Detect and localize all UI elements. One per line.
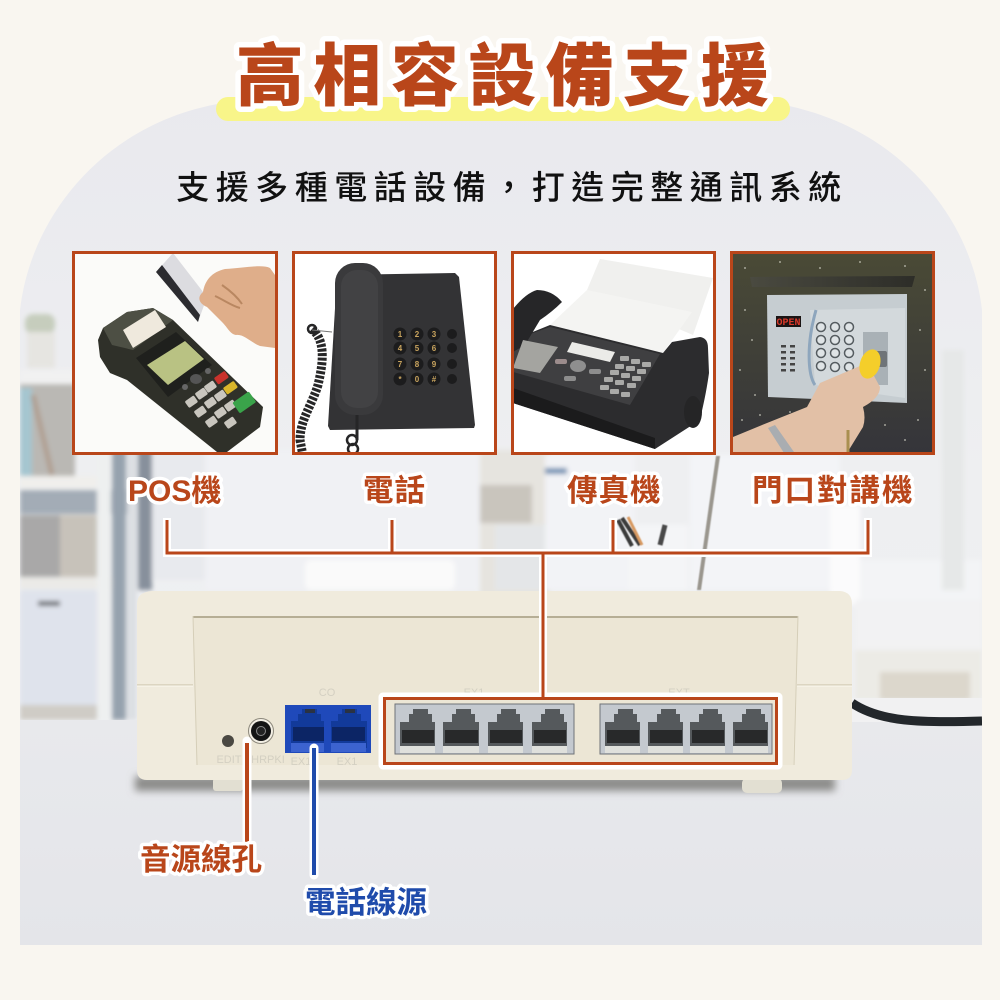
blue telephone jacks [285,705,371,753]
panel: telephone photo: 1 [398,330,403,339]
display [776,316,801,327]
title: 高相容設備支援 [236,39,778,115]
recessed rear panel [193,616,798,765]
device: extension box rear: EX1 [291,756,311,768]
panel: telephone photo: 6 [432,344,437,353]
callout frame around ports [384,698,776,764]
gray port group A [395,704,574,754]
connector: device bracket to ports [167,518,868,697]
panel: telephone photo: 3 [432,330,437,339]
audio jack [248,718,274,744]
connector: phone line [310,748,318,875]
panel: telephone photo: 5 [415,344,420,353]
panel: telephone photo: * [398,375,402,384]
device: extension box rear [137,591,852,793]
icon: POS body [98,308,263,452]
panel: door intercom photo: OPEN [776,318,801,329]
label: POS: POS機 [128,475,221,508]
label: telephone: 電話 [363,474,426,508]
panel: telephone photo: # [432,375,437,384]
device: extension box rear: EXT [668,687,690,699]
label: audio port: 音源線孔 [140,843,262,877]
panel: telephone photo: 9 [432,360,437,369]
device: extension box rear: CHRPKI [243,754,285,766]
panel: telephone photo [292,251,497,456]
icon: phone base [328,273,475,430]
label: fax: 傳真機 [567,474,662,508]
small hole [222,735,234,747]
connector: audio jack [242,741,252,850]
cable [852,703,982,722]
icon: yellow fob [859,349,881,379]
label: phone source: 電話線源 [305,886,427,920]
device: extension box rear: EDIT [216,754,242,766]
icon: handset [513,290,562,352]
icon: fax body [513,325,709,449]
hand [733,363,880,453]
icon: hand [199,266,275,348]
gray port group B [600,704,772,754]
intercom plate [767,294,907,403]
reader [863,332,888,385]
panel: telephone photo: 7 [398,360,403,369]
case body [137,591,852,780]
subtitle: 支援多種電話設備，打造完整通訊系統 [176,169,848,206]
foot [742,778,782,793]
foot [213,778,243,791]
speaker grid [513,340,558,373]
table surface [20,720,982,945]
panel: telephone photo: 2 [415,330,420,339]
panel: telephone photo: 8 [415,360,420,369]
white outline of port callout [381,695,780,767]
device: extension box rear: EX1 [337,756,357,768]
device: extension box rear: CO [319,687,336,699]
LCD [567,342,615,362]
icon: handset [335,263,381,308]
panel: door intercom photo [730,251,935,455]
icon: watch [768,425,794,453]
panel: telephone photo: 4 [398,344,403,353]
panel: POS terminal photo [72,251,278,455]
title highlight [216,97,790,121]
icon: card [162,254,204,322]
label: intercom: 門口對講機 [752,474,914,508]
device: extension box rear: EX1 [464,687,484,699]
overhang [750,276,915,287]
panel: telephone photo: 0 [415,375,420,384]
panel: fax machine photo [511,251,716,455]
icon: cord [300,329,322,456]
